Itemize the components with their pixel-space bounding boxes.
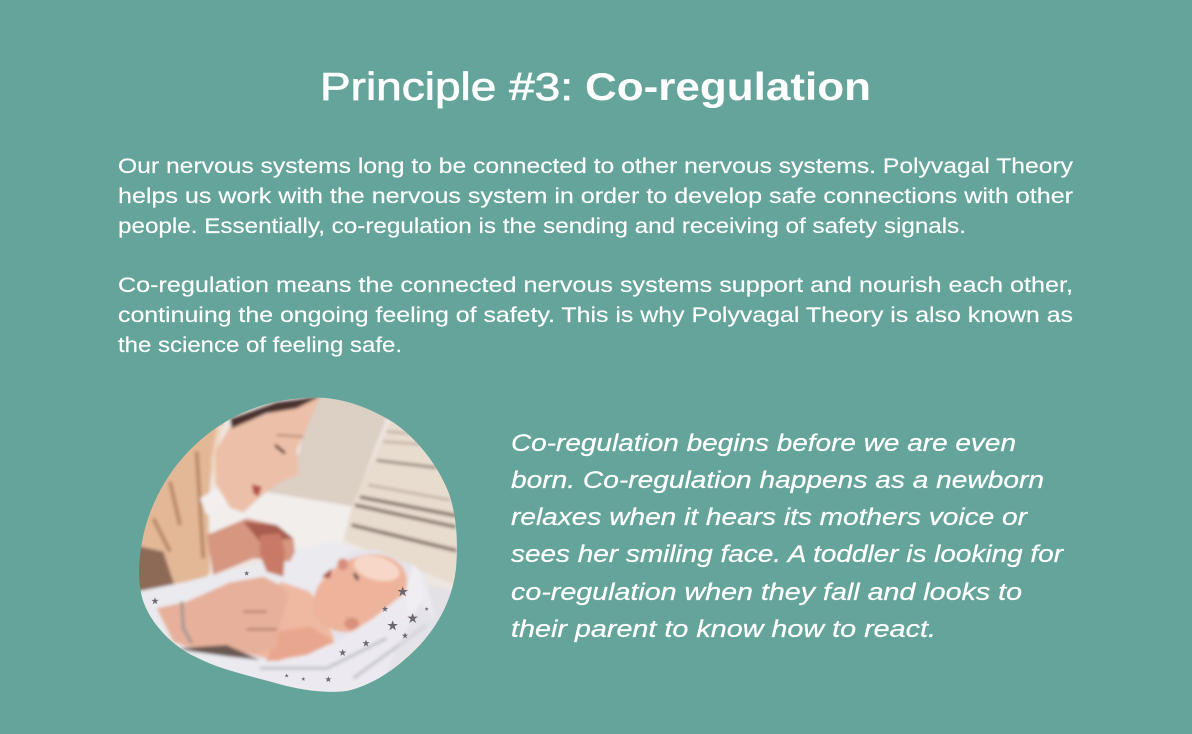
text block: intro paragraph: people. Essentially, co-regulation is the sending and receiving of safety signals. xyxy=(118,214,966,238)
italic quote text block: Co-regulation begins before we are even xyxy=(511,430,1016,457)
title: Principle #3: xyxy=(320,66,573,109)
text block: second paragraph: the science of feeling safe. xyxy=(118,333,402,357)
italic quote text block: co-regulation when they fall and looks to xyxy=(511,579,1022,606)
photo: mother and newborn in organic blob xyxy=(139,398,457,692)
title xyxy=(320,66,871,109)
icon: blanket stars xyxy=(151,571,429,682)
italic quote text block xyxy=(511,430,1064,643)
text block: second paragraph: continuing the ongoing feeling of safety. This is why Polyvagal Theory is also known as xyxy=(118,303,1073,327)
text block: second paragraph xyxy=(118,273,1073,357)
italic quote text block: relaxes when it hears its mothers voice or xyxy=(511,504,1028,531)
text block: second paragraph: Co-regulation means the connected nervous systems support and nourish each other, xyxy=(118,273,1073,297)
text block: intro paragraph: Our nervous systems long to be connected to other nervous systems. Polyvagal Theory xyxy=(118,154,1073,178)
text block: intro paragraph xyxy=(118,154,1073,238)
text block: intro paragraph: helps us work with the nervous system in order to develop safe connections with other xyxy=(118,184,1073,208)
italic quote text block: their parent to know how to react. xyxy=(511,616,936,643)
title: Co-regulation xyxy=(585,66,871,109)
italic quote text block: sees her smiling face. A toddler is looking for xyxy=(511,541,1064,568)
italic quote text block: born. Co-regulation happens as a newborn xyxy=(511,467,1044,494)
